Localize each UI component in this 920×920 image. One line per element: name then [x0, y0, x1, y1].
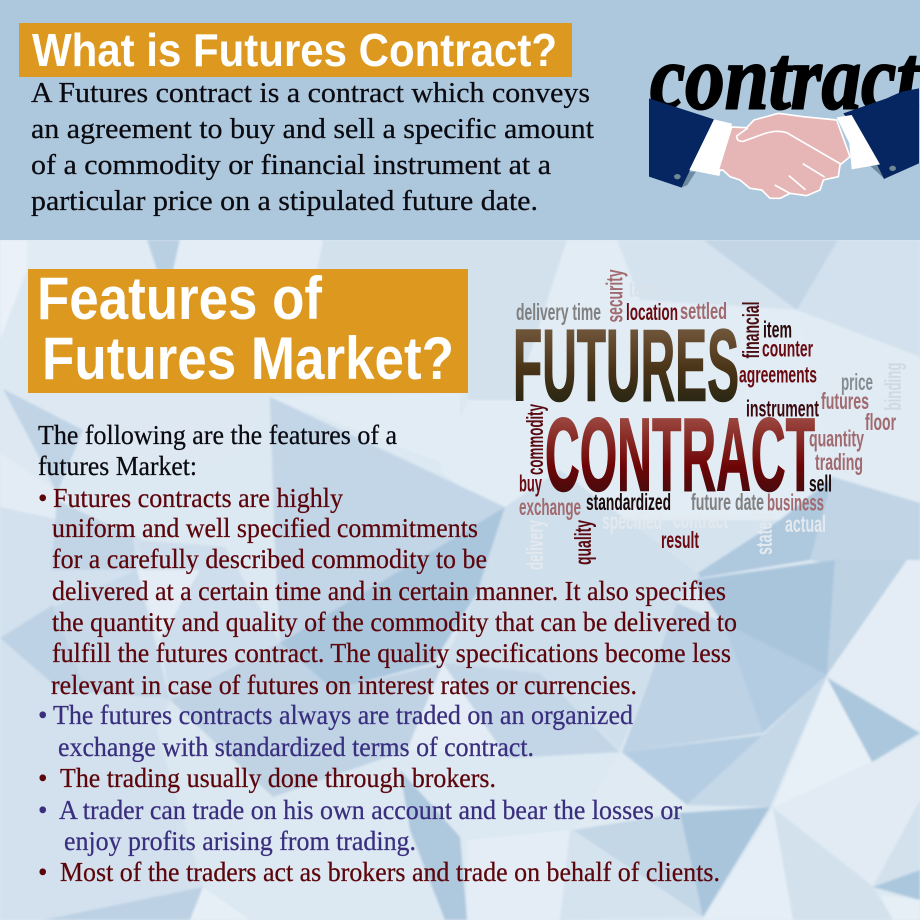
bullet 1: uniform commitments: • [38, 483, 47, 513]
bullet 1: uniform commitments: relevant in case of futures on interest rates or currencies. [51, 670, 637, 700]
background: low-poly lower section [0, 240, 920, 920]
bullet 4: own account [38, 795, 682, 856]
bullet 3: brokers: • [38, 763, 47, 793]
text block: futures contract definition [31, 77, 594, 217]
word cloud: futures contract terms: binding [880, 362, 906, 410]
word cloud: futures contract terms: commodity [522, 404, 548, 475]
bullet 2: organized exchange: exchange with standardized terms of contract. [58, 732, 534, 762]
word cloud: futures contract terms: actual [785, 511, 826, 537]
word cloud: futures contract terms: specified [602, 508, 662, 534]
bullet 1: uniform commitments: fulfill the futures contract. The quality specifications become less [52, 638, 731, 668]
word cloud: futures contract terms [513, 269, 906, 570]
word cloud: futures contract terms: instrument [746, 396, 819, 422]
word cloud: futures contract terms: settled [680, 298, 727, 324]
bullet 4: own account: A trader can trade on his own account and bear the losses or [59, 795, 682, 825]
word cloud: futures contract terms: exchange [519, 494, 581, 520]
heading: Features of Futures Market? [28, 265, 468, 393]
word cloud: futures contract terms: stated [751, 513, 777, 555]
word cloud: futures contract terms: agreements [739, 362, 817, 388]
heading: What is Futures Contract?: What is Futures Contract? [32, 24, 557, 76]
word cloud: futures contract terms: location [626, 299, 678, 325]
word cloud: futures contract terms: futures [821, 388, 869, 414]
word cloud: futures contract terms: security [602, 269, 628, 322]
word cloud: futures contract terms: contract [673, 507, 728, 533]
word cloud: futures contract terms: counter [762, 336, 813, 362]
text block: futures contract definition: of a commodity or financial instrument at a [31, 149, 551, 181]
bullet 1: uniform commitments [38, 483, 737, 700]
bullet 3: brokers: The trading usually done through brokers. [60, 763, 496, 793]
word cloud: futures contract terms: future date [691, 489, 764, 515]
panel: top definition band [0, 0, 920, 240]
word cloud: futures contract terms: business [767, 490, 824, 516]
text block: futures contract definition: particular price on a stipulated future date. [31, 185, 538, 217]
word cloud: futures contract terms: buy [519, 470, 542, 496]
icon: handshake with contract lettering [649, 27, 920, 198]
word cloud: futures contract terms: item [763, 316, 792, 342]
bullet 5: behalf of clients: Most of the traders act as brokers and trade on behalf of clients. [60, 857, 720, 887]
word cloud: futures contract terms: delivery time [516, 299, 601, 325]
bullet 4: own account: • [38, 795, 47, 825]
word cloud: futures contract terms: floor [865, 409, 896, 435]
bullet 1: uniform commitments: for a carefully described commodity to be [52, 544, 487, 574]
text block: futures contract definition: an agreement to buy and sell a specific amount [31, 113, 594, 145]
bullet 5: behalf of clients: • [38, 857, 47, 887]
word cloud: futures contract terms: price [841, 369, 873, 395]
word cloud: futures contract terms: sell [809, 470, 832, 496]
bullet 2: organized exchange: The futures contracts always are traded on an organized [53, 700, 633, 730]
heading: Features of Futures Market?: Futures Market? [42, 325, 454, 392]
heading: Features of Futures Market?: Features of [37, 265, 323, 332]
word cloud: futures contract terms: standardized [586, 489, 671, 515]
intro sentence [38, 420, 397, 481]
word cloud: futures contract terms: delivery [522, 520, 548, 570]
word cloud: futures contract terms: quality [570, 520, 596, 565]
bullet 1: uniform commitments: the quantity and quality of the commodity that can be delivered to [52, 607, 737, 637]
intro sentence: The following are the features of a [38, 420, 397, 450]
word cloud: futures contract terms: result [661, 527, 699, 553]
bullet 2: organized exchange [38, 700, 633, 762]
bullet 1: uniform commitments: delivered at a certain time and in certain manner. It also specifies [52, 576, 726, 606]
bullet 1: uniform commitments: Futures contracts are highly [53, 483, 343, 513]
text block: futures contract definition: A Futures contract is a contract which conveys [31, 77, 590, 109]
word cloud: futures contract terms: trading [815, 449, 863, 475]
bullet 2: organized exchange: • [38, 700, 47, 730]
text block: features list [38, 420, 737, 887]
word cloud: futures contract terms: quantity [809, 426, 864, 452]
word cloud: futures contract terms: terms [629, 276, 667, 302]
bullet 4: own account: enjoy profits arising from trading. [64, 826, 416, 856]
intro sentence: futures Market: [38, 451, 197, 481]
word cloud: futures contract terms: financial [738, 302, 764, 358]
bullet 1: uniform commitments: uniform and well specified commitments [52, 513, 478, 543]
